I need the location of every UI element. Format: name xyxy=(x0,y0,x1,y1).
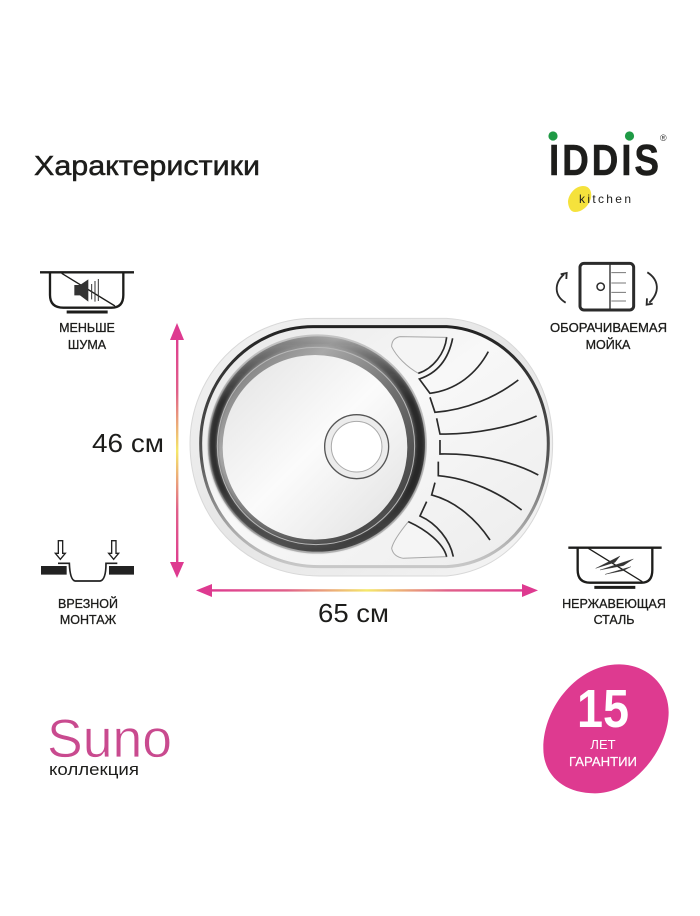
collection name: Suno xyxy=(47,709,172,769)
label: reversible sink: ОБОРАЧИВАЕМАЯ xyxy=(550,321,667,335)
sink deck xyxy=(201,327,548,567)
warranty badge: 15 xyxy=(577,679,629,739)
icon: less noise xyxy=(40,272,134,312)
logo: IDDIS kitchen: kitchen xyxy=(579,192,631,206)
sink bowl floor xyxy=(223,355,407,540)
collection name: коллекция xyxy=(49,761,139,779)
label: less noise: ШУМА xyxy=(68,338,107,352)
label: flush mount: ВРЕЗНОЙ xyxy=(58,596,118,611)
sink bowl wall xyxy=(209,335,426,553)
sink illustration xyxy=(190,318,553,576)
warranty badge: ЛЕТ xyxy=(590,737,616,752)
label: flush mount: МОНТАЖ xyxy=(60,613,117,627)
label: stainless steel: НЕРЖАВЕЮЩАЯ xyxy=(562,597,666,611)
drainboard ribs xyxy=(392,337,538,558)
logo: IDDIS kitchen xyxy=(548,131,667,212)
warranty badge: ГАРАНТИИ xyxy=(569,754,637,769)
height label: 46 см xyxy=(92,428,164,458)
horizontal dimension arrow xyxy=(196,584,538,597)
label: reversible sink xyxy=(550,321,667,352)
title: Характеристики xyxy=(34,150,260,181)
width label: 65 см xyxy=(318,598,389,628)
logo: IDDIS kitchen: IDDIS xyxy=(549,135,662,185)
sink bowl dark shading xyxy=(213,341,420,549)
icon: reversible sink xyxy=(557,263,657,310)
sink rim xyxy=(190,318,553,576)
icon: flush mount xyxy=(41,541,134,581)
label: stainless steel xyxy=(562,597,666,627)
vertical dimension arrow xyxy=(170,323,184,578)
icon: stainless steel xyxy=(568,548,662,587)
drain hole xyxy=(325,415,389,479)
logo: IDDIS kitchen: ® xyxy=(660,133,667,143)
label: flush mount xyxy=(58,596,118,627)
label: reversible sink: МОЙКА xyxy=(586,337,631,352)
warranty badge xyxy=(543,664,669,793)
label: less noise: МЕНЬШЕ xyxy=(59,321,115,335)
label: less noise xyxy=(59,321,115,352)
label: stainless steel: СТАЛЬ xyxy=(594,613,634,627)
